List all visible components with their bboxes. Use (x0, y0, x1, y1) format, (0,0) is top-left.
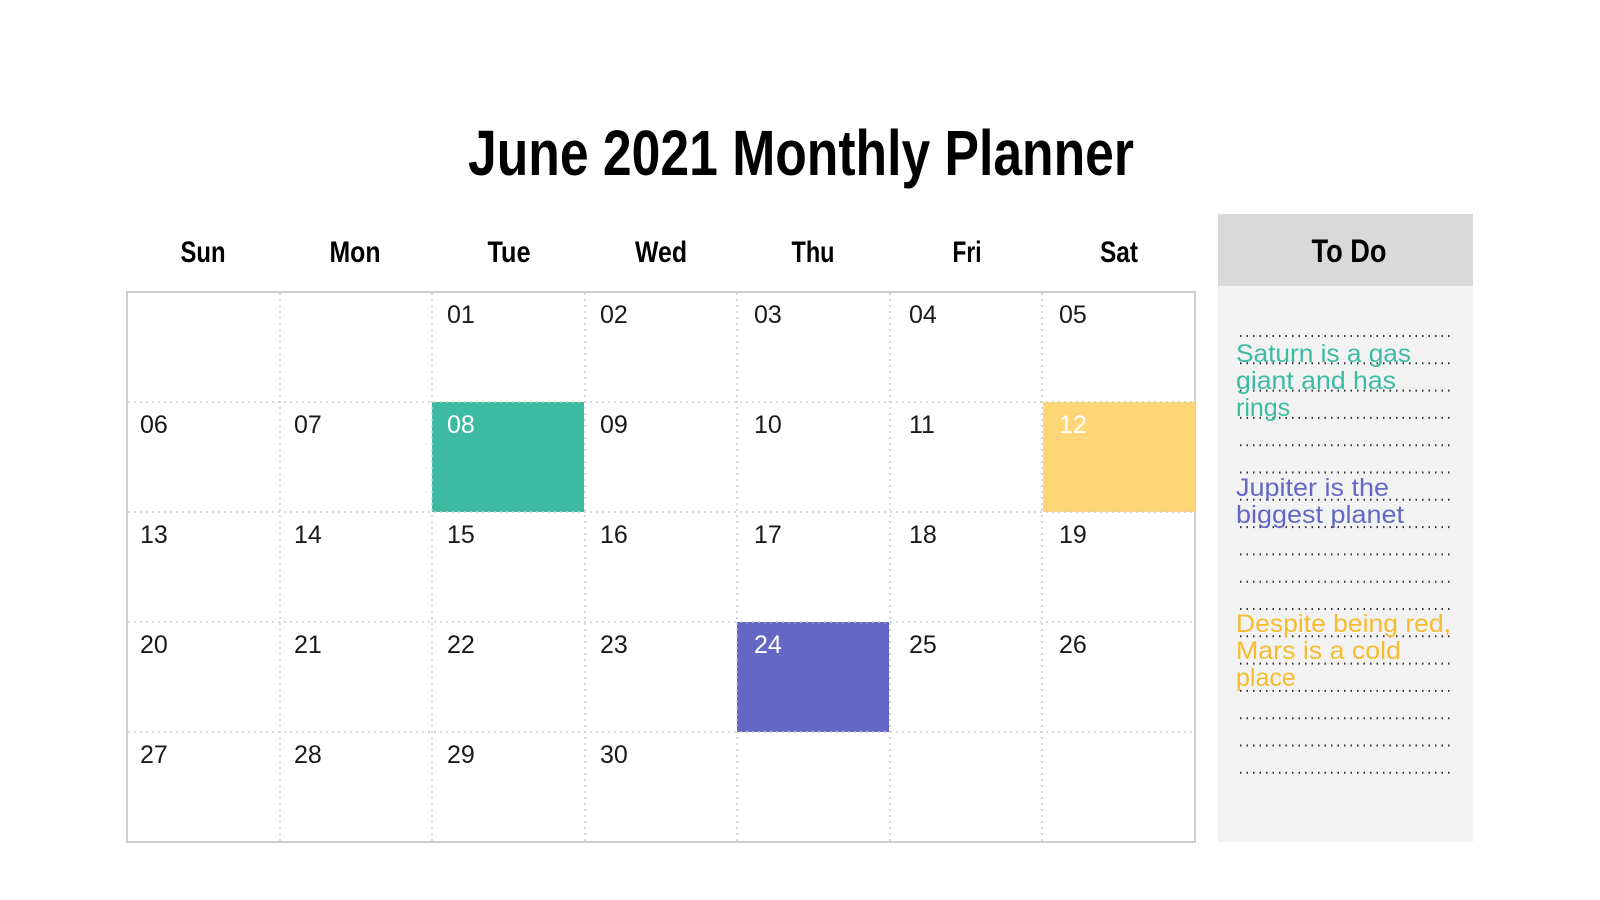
day numbers: 13 (140, 521, 168, 549)
todo: saturn: giant and has (1236, 367, 1396, 395)
todo: mars: Mars is a cold (1236, 637, 1401, 665)
calendar grid (127, 292, 1195, 842)
day numbers: 14 (294, 521, 322, 549)
day numbers: 03 (754, 301, 782, 329)
day numbers: 05 (1059, 301, 1087, 329)
weekday headers: Mon (330, 236, 380, 269)
weekday headers: Tue (488, 236, 530, 269)
weekday headers: Thu (792, 236, 834, 269)
day numbers: 09 (600, 411, 628, 439)
day numbers: 24 (754, 631, 782, 659)
day numbers: 25 (909, 631, 937, 659)
to do header (1218, 214, 1473, 286)
weekday headers (180, 236, 1138, 269)
todo: mars: Despite being red, (1236, 610, 1451, 638)
day numbers: 26 (1059, 631, 1087, 659)
day numbers: 10 (754, 411, 782, 439)
day numbers: 17 (754, 521, 782, 549)
day numbers: 29 (447, 741, 475, 769)
todo: saturn: rings (1236, 394, 1290, 422)
day numbers: 23 (600, 631, 628, 659)
day numbers: 18 (909, 521, 937, 549)
day numbers: 27 (140, 741, 168, 769)
weekday headers: Sat (1100, 236, 1138, 269)
day numbers: 15 (447, 521, 475, 549)
todo: jupiter: Jupiter is the (1236, 474, 1389, 502)
day numbers: 08 (447, 411, 475, 439)
day numbers: 28 (294, 741, 322, 769)
highlight: 24 (737, 622, 889, 732)
todo: mars: place (1236, 664, 1296, 692)
weekday headers: Fri (952, 236, 982, 269)
panel: to do (1218, 214, 1473, 842)
day numbers: 04 (909, 301, 937, 329)
title: June 2021 Monthly Planner (468, 117, 1134, 189)
todo: saturn: Saturn is a gas (1236, 340, 1411, 368)
day numbers: 20 (140, 631, 168, 659)
day numbers: 01 (447, 301, 475, 329)
todo: jupiter: biggest planet (1236, 501, 1404, 529)
day numbers: 19 (1059, 521, 1087, 549)
day numbers: 07 (294, 411, 322, 439)
day numbers (140, 301, 1087, 769)
day numbers: 02 (600, 301, 628, 329)
highlight: 12 (1043, 402, 1195, 512)
day numbers: 06 (140, 411, 168, 439)
day numbers: 12 (1059, 411, 1087, 439)
day numbers: 21 (294, 631, 322, 659)
to do header: To Do (1312, 233, 1386, 269)
weekday headers: Sun (180, 236, 226, 269)
day numbers: 16 (600, 521, 628, 549)
weekday headers: Wed (635, 236, 687, 269)
day numbers: 30 (600, 741, 628, 769)
highlight: 08 (432, 402, 584, 512)
day numbers: 22 (447, 631, 475, 659)
day numbers: 11 (909, 411, 935, 439)
